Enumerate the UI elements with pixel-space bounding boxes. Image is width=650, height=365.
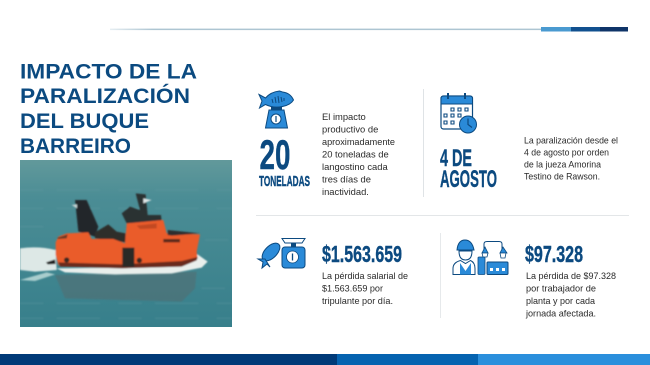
title [20, 60, 197, 158]
text: productive impact: productivo de [322, 124, 378, 134]
title: IMPACTO DE LA [20, 60, 197, 84]
stat: 20 toneladas: TONELADAS [259, 174, 310, 190]
title: BARREIRO [20, 135, 131, 158]
title: PARALIZACIÓN [20, 84, 190, 108]
text: worker loss: La pérdida de $97.328 [526, 270, 616, 281]
stat: 4 de agosto: AGOSTO [440, 166, 497, 193]
icon: calendar with clock [441, 93, 476, 133]
stat: 1.563.659: $1.563.659 [322, 241, 402, 267]
text: worker loss [525, 270, 616, 318]
icon: worker and plant machinery [453, 240, 508, 274]
text: productive impact: tres días de [322, 174, 371, 184]
text: worker loss: jornada afectada. [525, 308, 596, 318]
divider [440, 233, 441, 318]
stat: 20 toneladas: 20 [260, 131, 290, 178]
text: salary loss [322, 270, 408, 306]
divider [256, 215, 629, 216]
text: worker loss: por trabajador de [526, 282, 596, 294]
text: salary loss: La pérdida salarial de [322, 270, 408, 281]
icon: fish and scale with money [258, 238, 305, 268]
text: productive impact: 20 toneladas de [322, 148, 389, 160]
stat: 4 de agosto: 4 DE [440, 145, 472, 172]
text: productive impact: langostino cada [322, 161, 388, 172]
stat: 4 de agosto [440, 145, 497, 193]
text: productive impact: aproximadamente [322, 136, 395, 147]
text: stoppage date: La paralización desde el [524, 134, 618, 145]
title: DEL BUQUE [20, 110, 149, 133]
text: salary loss: tripulante por día. [322, 295, 393, 306]
text: productive impact: inactividad. [322, 186, 369, 197]
bottom colour band [0, 354, 650, 365]
text: stoppage date: Testino de Rawson. [524, 170, 600, 181]
icon: fish on weighing scale [259, 91, 294, 128]
divider [423, 89, 424, 197]
text: stoppage date: 4 de agosto por orden [524, 146, 609, 157]
photo: orange vessel at sea [20, 160, 232, 327]
text: stoppage date: de la jueza Amorina [524, 158, 602, 169]
stat: 97.328: $97.328 [525, 241, 583, 267]
top rule with colour blocks [110, 27, 628, 32]
text: stoppage date [524, 134, 618, 181]
text: productive impact: El impacto [322, 111, 366, 122]
text: productive impact [322, 111, 395, 197]
text: worker loss: planta y por cada [526, 295, 596, 306]
text: salary loss: $1.563.659 por [322, 282, 383, 294]
